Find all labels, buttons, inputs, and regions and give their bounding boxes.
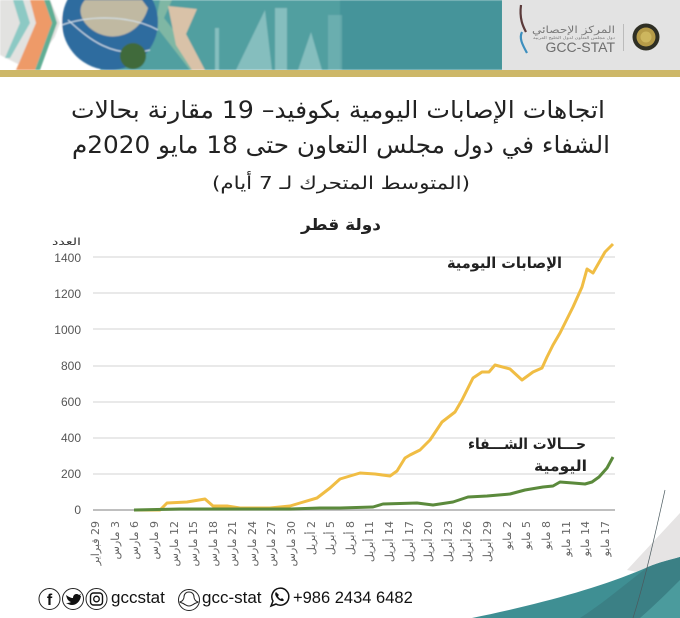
y axis labels: 1400	[54, 251, 81, 265]
x axis labels	[89, 521, 612, 566]
x axis labels: 18 مارس	[207, 521, 220, 566]
title	[71, 96, 610, 194]
x axis labels: 15 مارس	[187, 521, 200, 566]
header banner	[0, 0, 502, 70]
label: daily recoveries: حـــالات الشـــفاء	[468, 435, 586, 453]
label: daily recoveries	[468, 435, 587, 475]
x axis labels: 5 أبريل	[323, 521, 337, 555]
y axis title: العدد	[52, 237, 81, 248]
icon: twitter	[62, 588, 84, 610]
phone number: +986 2434 6482	[293, 589, 413, 607]
y axis labels: 0	[74, 503, 81, 517]
icon: instagram	[86, 588, 107, 610]
x axis labels: 17 أبريل	[402, 521, 416, 562]
logo panel	[502, 0, 680, 70]
logo panel: GCC-STAT	[546, 39, 615, 55]
x axis labels: 8 أبريل	[343, 521, 357, 555]
handle: gccstat: gccstat	[111, 588, 165, 607]
x axis labels: 2 أبريل	[304, 521, 318, 555]
x axis labels: 21 مارس	[226, 521, 239, 566]
x axis labels: 30 مارس	[285, 521, 298, 566]
y axis labels: 400	[61, 431, 81, 445]
x axis labels: 14 أبريل	[382, 521, 396, 562]
corner decoration	[472, 490, 680, 618]
city skyline	[215, 8, 342, 70]
logo panel: المركز الإحصائي	[532, 25, 615, 36]
icon: facebook: f	[47, 592, 53, 609]
label: daily recoveries: اليومية	[534, 457, 587, 475]
icon: facebook	[39, 588, 60, 610]
y axis labels: 600	[61, 395, 81, 409]
x axis labels: 2 مايو	[501, 521, 514, 550]
emblem	[632, 24, 660, 50]
x axis labels: 9 مارس	[148, 521, 161, 559]
x axis labels: 11 أبريل	[362, 521, 376, 562]
icon: whatsapp	[271, 588, 289, 606]
x axis labels: 11 مايو	[560, 521, 573, 557]
icon: snapchat	[178, 590, 200, 610]
x axis labels: 27 مارس	[265, 521, 278, 566]
x axis labels: 23 أبريل	[441, 521, 455, 562]
line chart	[52, 237, 615, 566]
title: اتجاهات الإصابات اليومية بكوفيد– 19 مقارنة بحالات	[71, 96, 605, 124]
label: daily cases: الإصابات اليومية	[447, 254, 562, 272]
x axis labels: 20 أبريل	[421, 521, 435, 562]
x axis labels: 6 مارس	[128, 521, 141, 559]
y axis labels: 200	[61, 467, 81, 481]
x axis labels: 14 مايو	[579, 521, 592, 557]
footer social links	[39, 588, 413, 610]
y axis labels: 800	[61, 359, 81, 373]
chart title: دولة قطر	[300, 215, 381, 234]
x axis labels: 5 مايو	[520, 521, 533, 550]
x axis labels: 12 مارس	[168, 521, 181, 566]
title: (المتوسط المتحرك لـ 7 أيام)	[212, 171, 470, 194]
y axis labels	[54, 251, 81, 517]
x axis labels: 3 مارس	[109, 521, 122, 559]
series: daily recoveries	[134, 457, 613, 510]
y axis labels: 1200	[54, 287, 81, 301]
logo panel: دول مجلس التعاون لدول الخليج العربية	[533, 35, 615, 40]
series: daily cases	[134, 244, 613, 510]
x axis labels: 17 مايو	[599, 521, 612, 557]
x axis labels: 8 مايو	[540, 521, 553, 550]
x axis labels: 24 مارس	[246, 521, 259, 566]
x axis labels: 29 فبراير	[89, 521, 102, 566]
x axis labels: 29 أبريل	[480, 521, 494, 562]
title: الشفاء في دول مجلس التعاون حتى 18 مايو 2020م	[72, 131, 610, 159]
globe	[62, 0, 158, 70]
x axis labels: 26 أبريل	[460, 521, 474, 562]
y axis labels: 1000	[54, 323, 81, 337]
gold band	[0, 70, 680, 77]
handle: gcc-stat: gcc-stat	[202, 588, 262, 607]
